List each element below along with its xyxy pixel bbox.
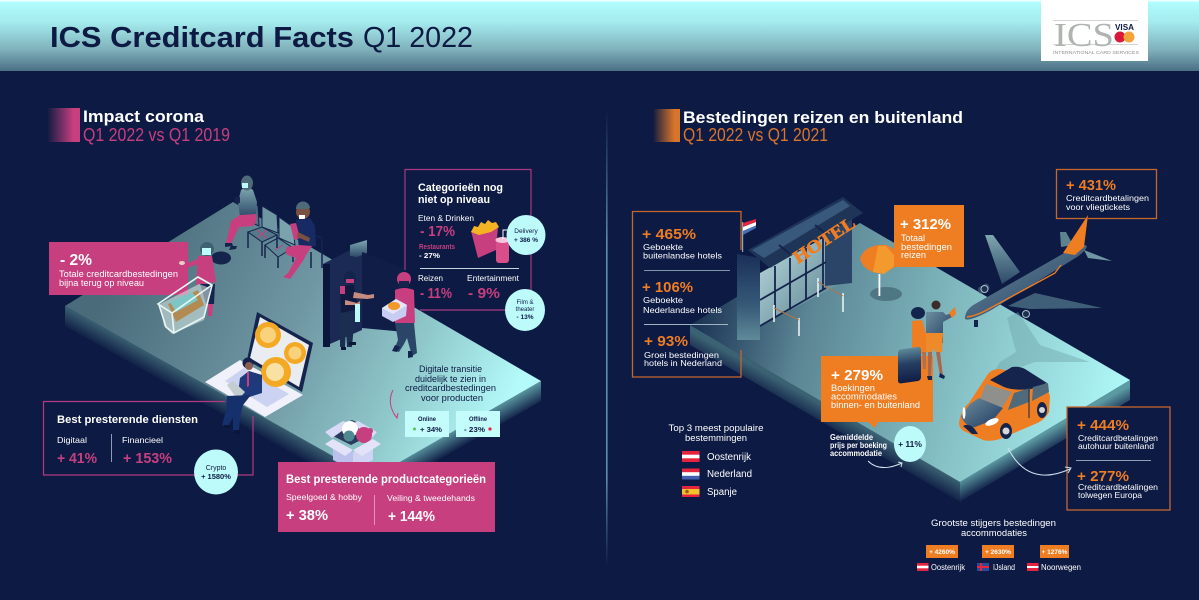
list: grootste stijgers: Grootste stijgers bestedingen (931, 518, 1056, 528)
list: grootste stijgers: accommodaties (961, 528, 1028, 538)
arrow: gemiddelde prijs (868, 461, 902, 468)
card: online: Online (418, 416, 436, 423)
text: gemiddelde prijs per boeking: Gemiddelde (830, 433, 874, 442)
card: online (405, 411, 449, 437)
badge: noorwegen (1040, 545, 1069, 558)
panel: categorieen nog niet op niveau: Entertainment (467, 274, 520, 283)
callout: +312% totaal: bestedingen (901, 242, 952, 252)
hotel sign: HOTEL (789, 212, 859, 267)
panel: autohuur en tolwegen: autohuur buitenland (1078, 441, 1154, 451)
icon: fries and drink (471, 220, 510, 263)
card: offline: - 23% (464, 425, 485, 434)
panel: categorieen nog niet op niveau: niet op niveau (418, 194, 490, 206)
illustration: barrier posts (774, 278, 843, 336)
section heading: impact corona (47, 107, 230, 145)
panel: categorieen nog niet op niveau: Eten & Drinken (418, 214, 474, 223)
panel: best presterende diensten: Financieel (122, 435, 163, 445)
section heading: bestedingen reizen (653, 108, 963, 145)
callout: +279% accommodaties: accommodaties (831, 392, 898, 402)
callout: +312% totaal: Totaal (901, 233, 925, 243)
panel: categorieen nog niet op niveau: - 17% (420, 223, 455, 240)
panel: best presterende productcategorieen: Best presterende productcategorieën (286, 472, 486, 486)
panel: best presterende productcategorieen (278, 462, 495, 532)
ICS logo: ICS (1054, 17, 1114, 54)
badge: oostenrijk: + 4260% (929, 549, 955, 556)
bubble: delivery: Delivery (514, 228, 538, 235)
panel: hotels: + 465% (642, 226, 696, 243)
ICS logo (1041, 0, 1148, 61)
bubble: crypto: Crypto (206, 465, 226, 472)
bubble: crypto: + 1580% (201, 472, 231, 481)
list: grootste stijgers: Oostenrijk (931, 563, 966, 572)
bubble: film en theater: - 13% (517, 314, 534, 321)
list: grootste stijgers: IJsland (993, 563, 1015, 572)
bubble: film en theater (505, 289, 545, 331)
panel: categorieen nog niet op niveau (405, 170, 546, 331)
panel: autohuur en tolwegen: Creditcardbetalingen (1078, 482, 1158, 492)
illustration: dark doorway (323, 240, 405, 347)
illustration: delivery person with pizza (382, 272, 417, 358)
list: top 3 bestemmingen: bestemmingen (685, 433, 747, 443)
panel: hotels: + 93% (644, 333, 688, 350)
ICS logo: VISA (1115, 23, 1134, 32)
panel: autohuur en tolwegen (1067, 407, 1170, 510)
callout: +279% accommodaties: binnen- en buitenland (831, 400, 920, 410)
callout: +312% totaal (894, 205, 964, 267)
callout: +312% totaal: reizen (901, 250, 926, 260)
panel: categorieen nog niet op niveau: - 27% (419, 251, 440, 260)
section heading: bestedingen reizen: Q1 2022 vs Q1 2021 (683, 125, 828, 145)
panel: best presterende productcategorieen: Veiling & tweedehands (387, 493, 475, 503)
callout: +279% accommodaties: + 279% (831, 367, 883, 384)
panel: best presterende productcategorieen: + 38% (286, 507, 328, 524)
badge: oostenrijk (926, 545, 958, 558)
panel: autohuur en tolwegen: Creditcardbetalingen (1078, 433, 1158, 443)
bubble: film en theater: theater (516, 307, 534, 313)
panel: hotels: Geboekte (643, 242, 683, 252)
panel: hotels: Groei bestedingen (644, 350, 719, 360)
list: grootste stijgers: Noorwegen (1041, 563, 1081, 572)
text: digitale transitie (405, 364, 496, 403)
text: digitale transitie: Digitale transitie (419, 364, 482, 374)
bubble: +11%: + 11% (898, 439, 922, 449)
callout: -2% totale bestedingen: Totale creditcardbestedingen (59, 269, 178, 279)
illustration: travelling couple (898, 300, 956, 384)
panel: categorieen nog niet op niveau: Reizen (418, 274, 443, 283)
panel: autohuur en tolwegen: tolwegen Europa (1078, 490, 1142, 500)
bubble: +11% (894, 426, 926, 462)
panel: best presterende diensten: + 41% (57, 450, 97, 467)
callout: -2% totale bestedingen: - 2% (60, 252, 92, 269)
right isometric platform (690, 223, 1130, 502)
text: gemiddelde prijs per boeking: prijs per boeking (830, 441, 887, 450)
illustration: hotel building (737, 197, 863, 340)
card: offline: Offline (469, 416, 487, 423)
flag: noorwegen small (1027, 563, 1038, 571)
panel: categorieen nog niet op niveau: - 9% (468, 285, 500, 302)
list: grootste stijgers (917, 518, 1081, 572)
illustration: waiting room chairs (248, 202, 322, 268)
panel: autohuur en tolwegen: + 444% (1077, 417, 1129, 434)
section heading: bestedingen reizen: Bestedingen reizen en buitenland (683, 108, 963, 127)
illustration: seated man with tablet (283, 201, 316, 279)
flag: nederland (682, 468, 700, 480)
flag: oostenrijk (682, 451, 700, 462)
list: top 3 bestemmingen: Spanje (707, 487, 737, 498)
illustration: laptop with crypto coins (205, 312, 313, 417)
text: digitale transitie: voor producten (421, 393, 483, 403)
bubble: crypto (194, 450, 238, 494)
flag: ijsland small (977, 563, 989, 571)
section heading: impact corona: Impact corona (83, 107, 205, 126)
text: gemiddelde prijs per boeking: accommodatie (830, 449, 883, 458)
callout: +431% vliegtickets (1056, 170, 1156, 218)
ICS logo: INTERNATIONAL CARD SERVICES (1053, 50, 1139, 55)
icon: dutch flag on hotel (742, 219, 756, 252)
illustration: woman with shopping cart (158, 242, 231, 334)
callout: +431% vliegtickets: Creditcardbetalingen (1066, 193, 1149, 203)
bubble: delivery (506, 215, 546, 255)
text: digitale transitie: duidelijk te zien in (415, 374, 486, 384)
header band (0, 0, 1199, 71)
illustration: parasol (860, 245, 902, 301)
panel: categorieen nog niet op niveau: - 11% (420, 285, 452, 302)
list: top 3 bestemmingen (668, 423, 764, 498)
panel: best presterende productcategorieen: + 144% (388, 508, 435, 525)
flag: oostenrijk small (917, 563, 928, 571)
flag: spanje (682, 486, 700, 497)
panel: hotels: buitenlandse hotels (643, 250, 722, 260)
arrow: digitale transitie (390, 390, 398, 418)
card: offline (456, 411, 500, 437)
callout: +312% totaal: + 312% (900, 216, 951, 233)
callout: +279% accommodaties: Boekingen (831, 383, 875, 393)
panel: hotels: Nederlandse hotels (643, 305, 722, 315)
panel: best presterende productcategorieen: Speelgoed & hobby (286, 492, 363, 502)
badge: ijsland: + 2630% (985, 549, 1011, 556)
panel: best presterende diensten (44, 402, 253, 494)
illustration: man with laptop (222, 358, 262, 434)
panel: best presterende diensten: + 153% (123, 450, 172, 467)
panel: categorieen nog niet op niveau: Categorieën nog (418, 182, 503, 194)
text: digitale transitie: creditcardbestedingen (405, 383, 496, 393)
panel: hotels (632, 212, 741, 377)
section heading: impact corona: Q1 2022 vs Q1 2019 (83, 125, 230, 145)
illustration: orange car (959, 367, 1050, 441)
left isometric platform (65, 202, 541, 498)
callout: -2% totale bestedingen: bijna terug op niveau (59, 278, 144, 288)
title: ICS Creditcard Facts (50, 22, 354, 54)
bubble: film en theater: Film & (516, 300, 534, 306)
list: top 3 bestemmingen: Nederland (707, 469, 752, 480)
panel: hotels: hotels in Nederland (644, 358, 722, 368)
arrow: car to panel (1008, 448, 1071, 475)
panel: hotels: + 106% (642, 279, 693, 296)
illustration: man at door (340, 271, 374, 350)
title: Q1 2022 (363, 22, 473, 54)
badge: noorwegen: + 1276% (1042, 549, 1068, 556)
panel: hotels: Geboekte (643, 295, 683, 305)
callout: -2% totale bestedingen (49, 242, 188, 295)
illustration: airplane (965, 215, 1112, 327)
card: online: + 34% (420, 425, 442, 434)
panel: categorieen nog niet op niveau: Restaurants (419, 244, 455, 251)
illustration: seated woman with phone (225, 176, 257, 250)
title (50, 22, 473, 54)
panel: best presterende diensten: Digitaal (57, 435, 87, 445)
callout: +431% vliegtickets: voor vliegtickets (1066, 202, 1130, 212)
panel: autohuur en tolwegen: + 277% (1077, 468, 1129, 485)
bubble: delivery: + 386 % (514, 237, 538, 244)
text: gemiddelde prijs per boeking (830, 433, 887, 458)
callout: +279% accommodaties (821, 356, 933, 428)
panel: best presterende diensten: Best presterende diensten (57, 414, 198, 426)
illustration: gift box (325, 420, 381, 470)
list: top 3 bestemmingen: Oostenrijk (707, 452, 752, 463)
badge: ijsland (982, 545, 1014, 558)
list: top 3 bestemmingen: Top 3 meest populaire (668, 423, 764, 433)
callout: +431% vliegtickets: + 431% (1066, 177, 1116, 194)
